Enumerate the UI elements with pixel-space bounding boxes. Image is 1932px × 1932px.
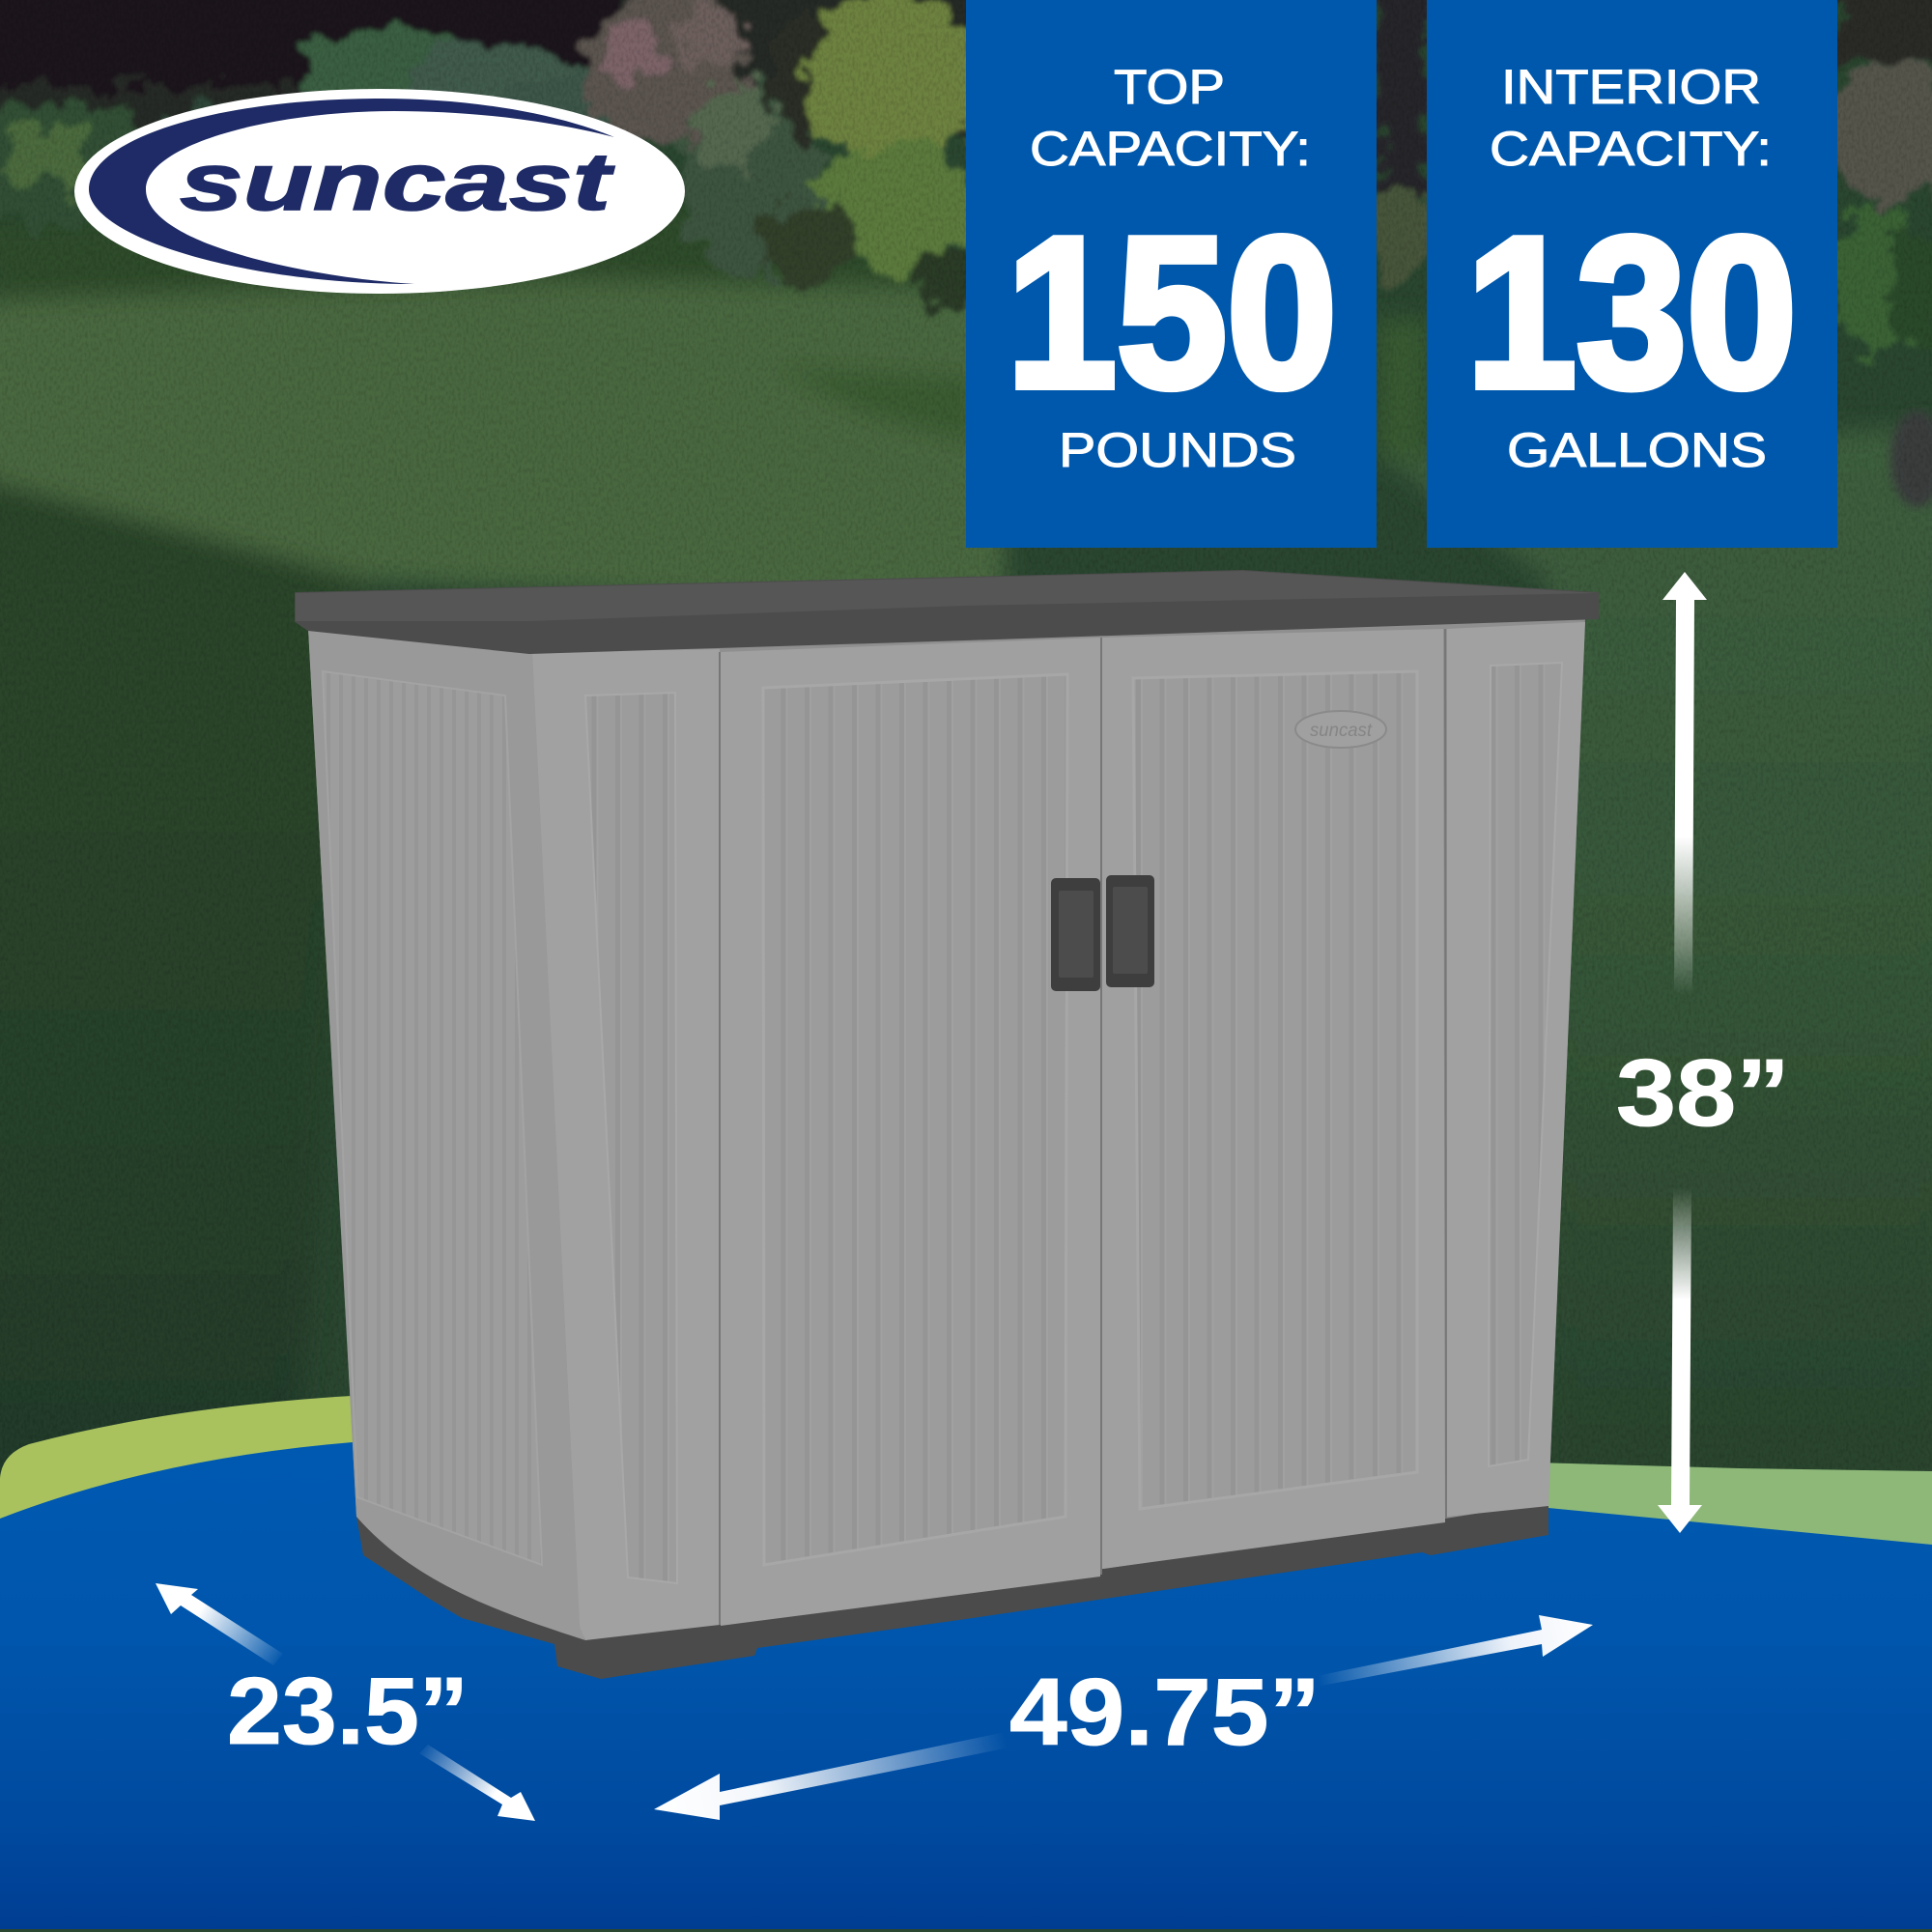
shed body underlay (308, 618, 1585, 1637)
heading: interior capacity (1490, 60, 1772, 176)
shed corner post (532, 649, 720, 1640)
blue ground (0, 1442, 1932, 1929)
heading: top capacity (1030, 60, 1311, 176)
left door rib panel (763, 674, 1067, 1565)
dimension label: depth: 23.5” (227, 1658, 469, 1764)
logo wordmark: suncast (180, 136, 614, 227)
unit: pounds: POUNDS (1059, 423, 1296, 477)
heading: interior capacity: INTERIOR (1501, 60, 1761, 114)
foliage (0, 0, 1932, 357)
dimension label: width: 49.75” (1009, 1659, 1321, 1765)
green band left (0, 1395, 367, 1536)
arrow: height 38 lower (1658, 1188, 1702, 1533)
right door handle (1106, 875, 1154, 987)
arrow: width left (654, 1731, 1014, 1820)
shed (296, 571, 1598, 1679)
rock at right edge (1890, 411, 1932, 507)
number: 150: 150 (1007, 193, 1337, 433)
arrow: depth upper (156, 1583, 283, 1665)
right post (1447, 622, 1585, 1517)
floor: green band and blue ground (0, 1395, 1932, 1929)
side rib panel (323, 671, 542, 1565)
lid top face (296, 571, 1598, 621)
shed base (356, 1502, 1548, 1679)
lid (296, 571, 1598, 653)
arrow: height 38 upper (1662, 572, 1707, 995)
number: 130: 130 (1466, 193, 1797, 433)
dimension label: height: 38” (1616, 1039, 1790, 1146)
door seams (720, 629, 1446, 1625)
green band right (1536, 1463, 1932, 1555)
unit: gallons: GALLONS (1507, 423, 1767, 477)
panel: top capacity (966, 0, 1377, 548)
right post rib panel (1489, 663, 1562, 1466)
left door handle (1051, 878, 1100, 991)
arrow: width right (1317, 1615, 1593, 1687)
heading: interior capacity: CAPACITY: (1490, 122, 1772, 176)
right door (1102, 629, 1445, 1569)
logo: suncast oval (74, 89, 685, 294)
embossed door logo (1295, 711, 1386, 748)
arrow: depth lower (419, 1745, 535, 1821)
left door (721, 638, 1100, 1626)
logo swoosh (89, 99, 614, 284)
embossed door logo: suncast (1310, 721, 1373, 741)
right door rib panel (1133, 671, 1417, 1509)
shed left side (308, 628, 585, 1640)
heading: top capacity: TOP (1114, 60, 1225, 114)
heading: top capacity: CAPACITY: (1030, 122, 1311, 176)
panel: interior capacity (1427, 0, 1837, 548)
corner rib panel (585, 693, 677, 1583)
